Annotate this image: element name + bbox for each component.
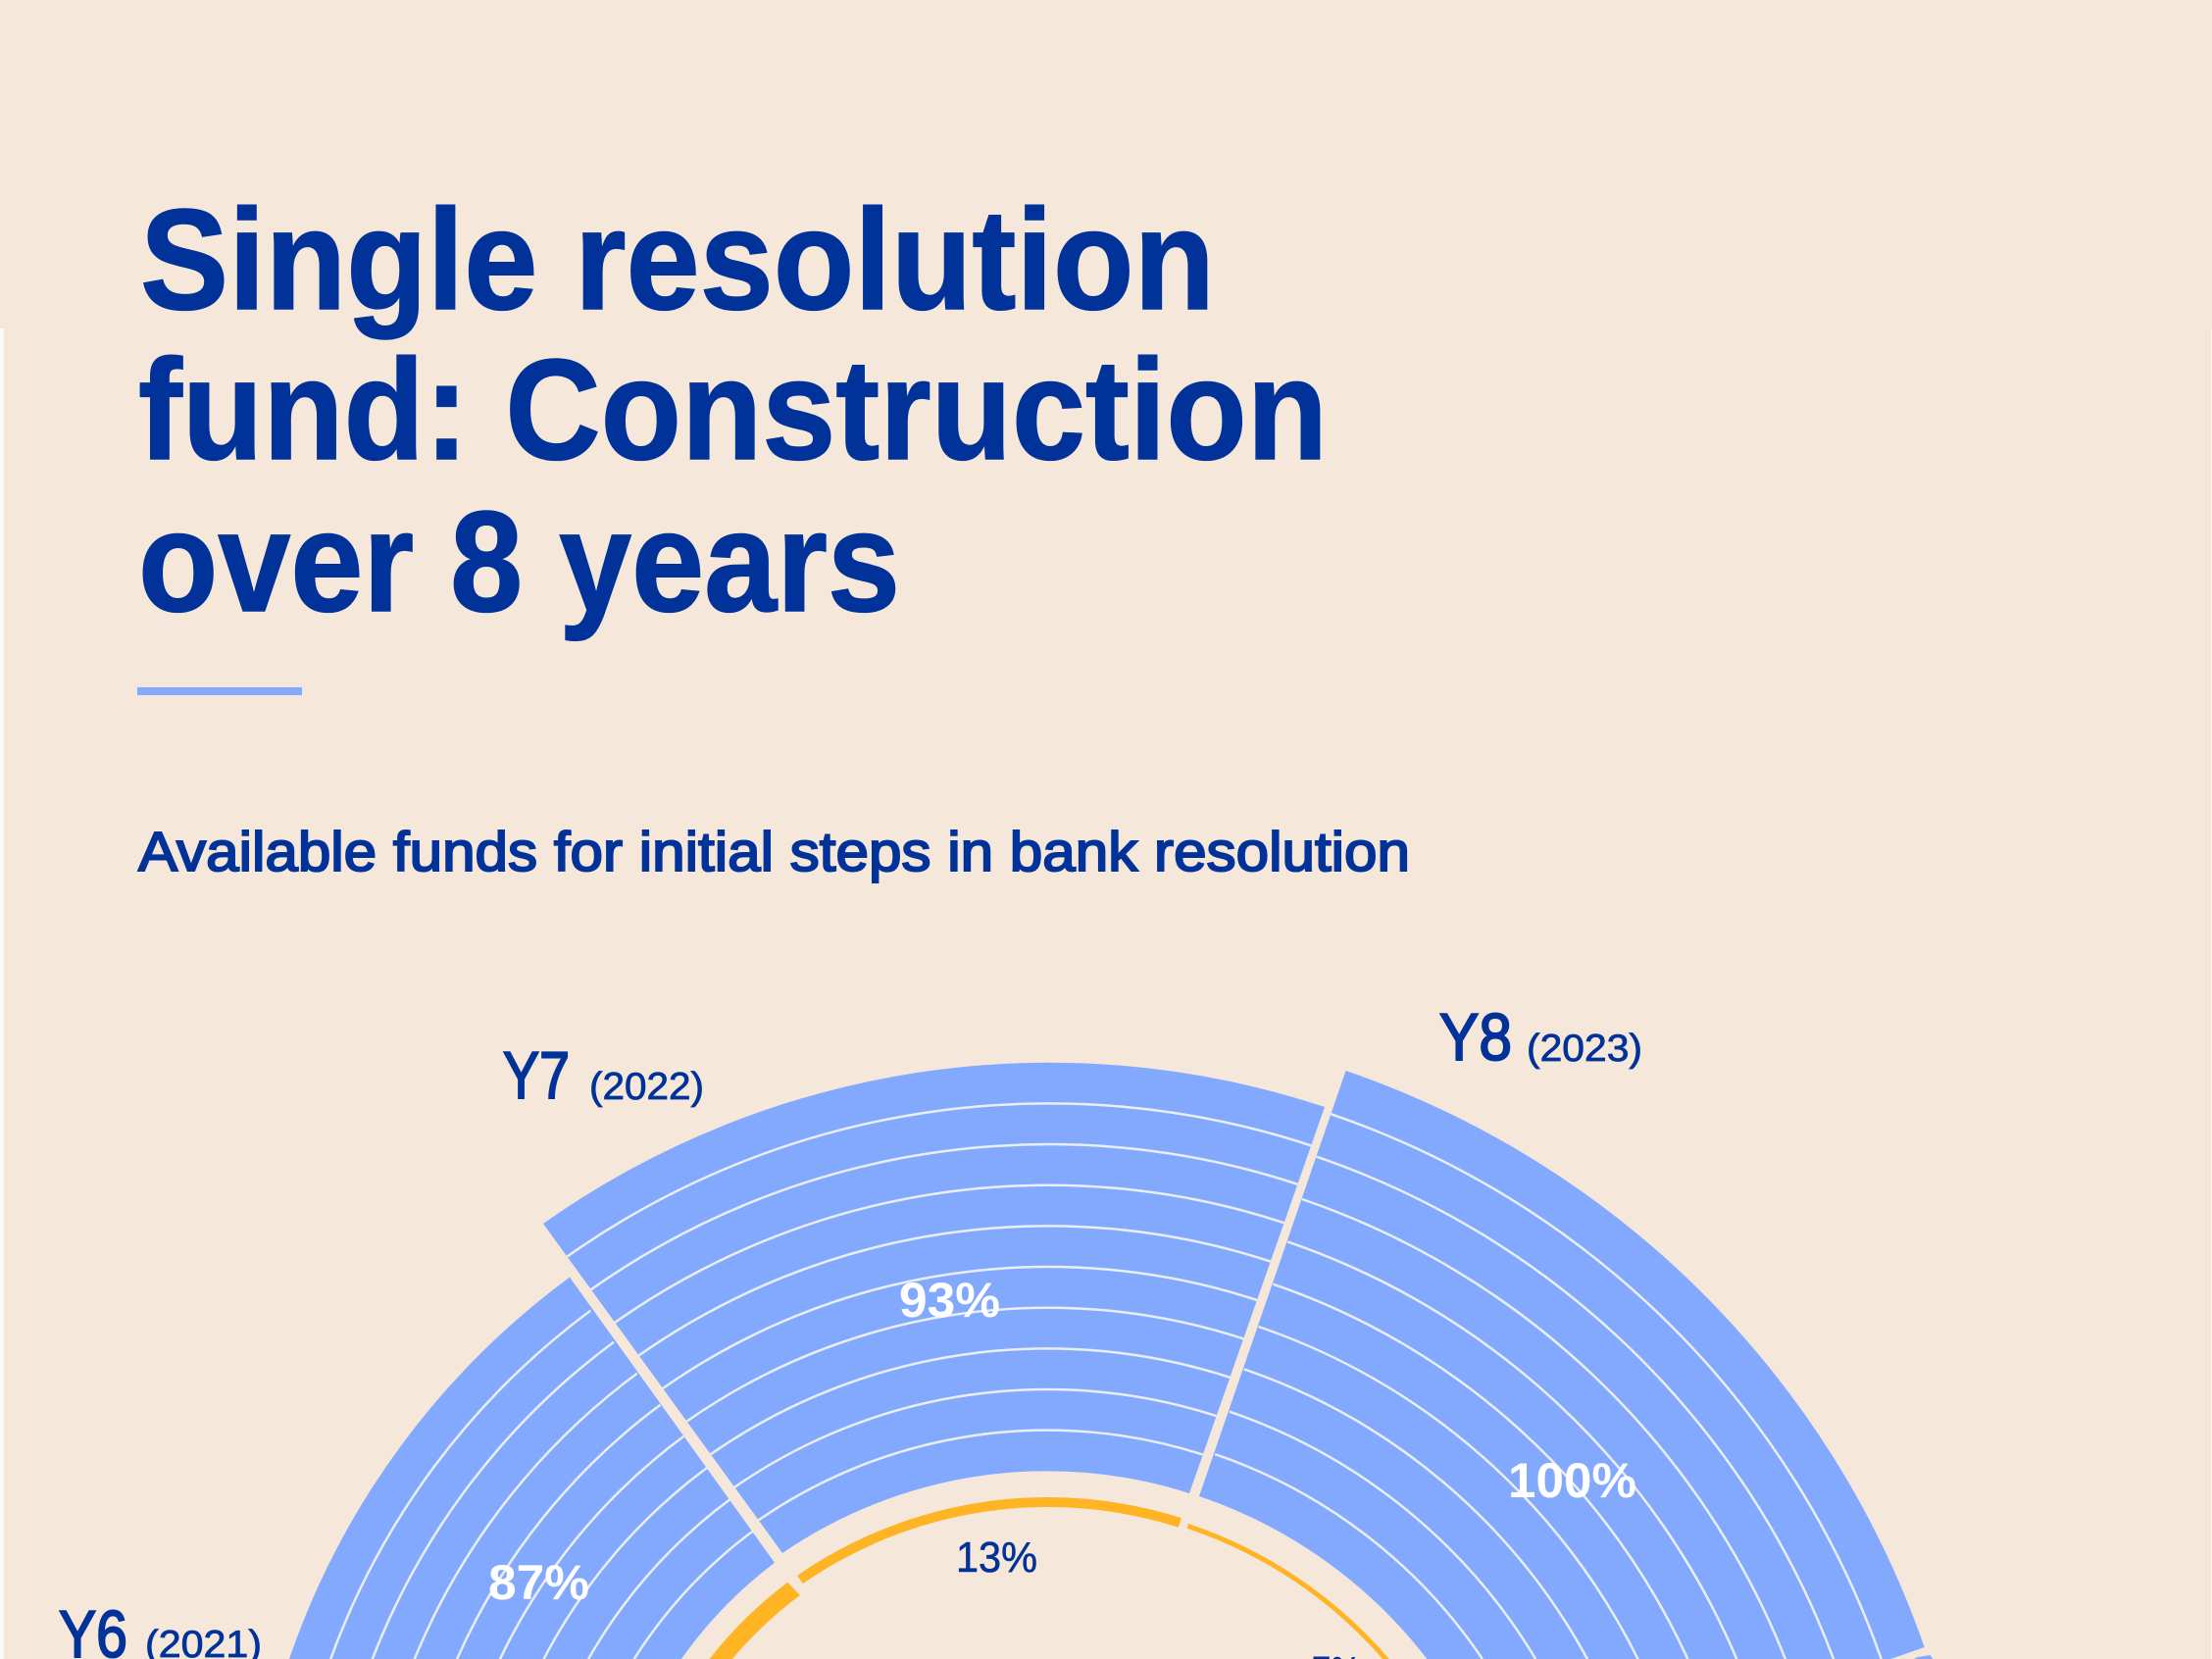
value label: 13%: 13% [956,1533,1037,1582]
year label: Y8 2023: (2023) [1527,1028,1642,1070]
year label: Y6 2021 [59,1597,262,1659]
orange arc: Y8 [1187,1524,1389,1659]
year label: Y8 2023 [1439,1000,1642,1075]
value label: 93%: 93% [899,1273,1000,1328]
title: fund: Construction [138,329,1328,489]
subtitle: Available funds for initial steps in bank resolution [138,821,1410,883]
year label: Y7 2022: Y7 [503,1038,570,1113]
title: Single resolution [140,179,1215,339]
segment: Y8 2023 blue ring, 100% [1199,1071,1925,1659]
next segment corner at bottom right [1914,1655,1933,1659]
orange arc: Y7 [800,1502,1180,1580]
segment: Y7 2022 blue ring, 93% [543,1063,1325,1553]
segment: Y6 2021 blue ring, 87% [289,1278,775,1659]
orange arc: Y6 [710,1583,800,1659]
year label: Y7 2022 [503,1038,704,1113]
title: over 8 years [138,481,900,641]
value label: 87%: 87% [488,1555,589,1610]
title [138,179,1328,641]
radial chart: fund construction by year [59,1000,1933,1659]
year label: Y7 2022: (2022) [589,1066,704,1108]
year label: Y8 2023: Y8 [1439,1000,1512,1075]
title accent bar [137,687,302,695]
value label: 100%: 100% [1508,1453,1636,1508]
